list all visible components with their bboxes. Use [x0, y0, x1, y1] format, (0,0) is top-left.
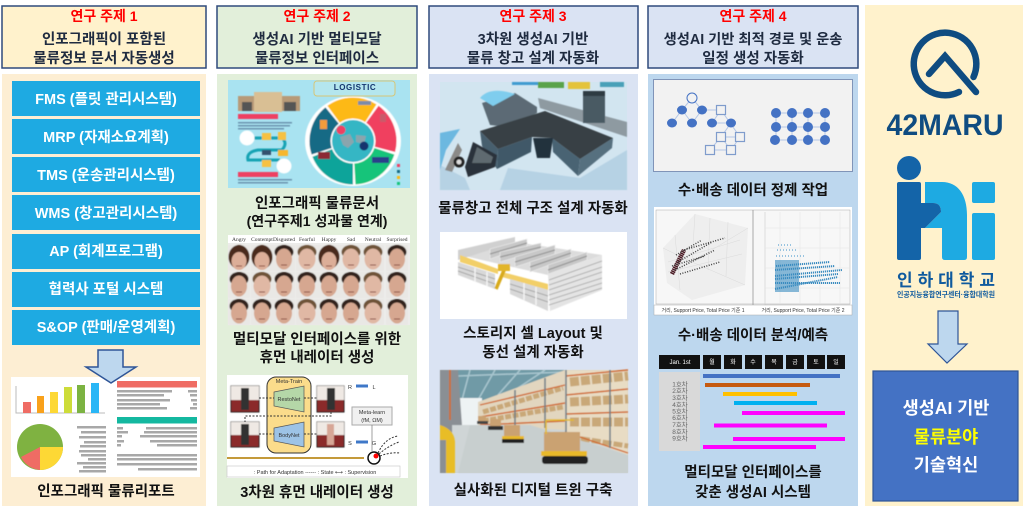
Gantt schedule chart: 토: [813, 359, 819, 366]
system list: WMS (창고관리시스템): [35, 205, 177, 222]
system list: S&OP (판매/운영계획): [37, 319, 175, 336]
meta-learning diagram: S: [348, 441, 352, 447]
facial expression image grid: Neutral: [365, 237, 382, 243]
caption: generative AI system: 갖춘 생성AI 시스템: [695, 484, 811, 501]
caption: data cleaning: 수·배송 데이터 정제 작업: [678, 182, 828, 199]
caption: infographic document: [247, 195, 387, 229]
heading: topic 4: 일정 생성 자동화: [702, 50, 804, 67]
caption: storage cell layout: [463, 325, 603, 361]
heading: topic 2: 물류정보 인터페이스: [255, 50, 379, 67]
caption: data analysis: 수·배송 데이터 분석/예측: [678, 327, 828, 344]
callout: technology innovation: 물류분야: [914, 427, 978, 447]
Gantt schedule chart: 6호차: [672, 413, 688, 422]
Gantt schedule chart: 9호차: [672, 434, 688, 442]
Gantt schedule chart: [659, 355, 845, 451]
facial expression image grid: Surprised: [386, 237, 408, 243]
scatter plots image: [654, 207, 852, 315]
panel background: topic 1 body: [2, 74, 206, 506]
facial expression image grid: Contempt: [251, 237, 273, 243]
heading: topic 4: [648, 6, 858, 68]
facial expression image grid: Disgusted: [273, 237, 295, 243]
system list: FMS (플릿 관리시스템): [35, 91, 177, 108]
caption: generative AI system: [684, 464, 822, 501]
caption: human narrator generation: [233, 331, 401, 366]
meta-learning diagram: R: [348, 385, 352, 391]
heading: topic 3: 3차원 생성AI 기반: [478, 31, 588, 48]
system list: 협력사 포털 시스템: [49, 281, 163, 298]
caption: human narrator generation: 휴먼 내레이터 생성: [260, 349, 374, 366]
caption: realistic digital twin: 실사화된 디지털 트윈 구축: [454, 482, 612, 499]
scatter plots image: 거리, Support Price, Total Price 기준 2: [761, 307, 845, 314]
meta-learning diagram: G: [372, 441, 376, 447]
caption: storage cell layout: 스토리지 셀 Layout 및: [463, 325, 603, 342]
Gantt schedule chart: 금: [792, 359, 798, 366]
Gantt schedule chart: 7호차: [672, 420, 688, 429]
heading: topic 2: 연구 주제 2: [283, 8, 351, 24]
meta-learning diagram: RestoNet: [278, 397, 301, 403]
logistic infographic image: [228, 80, 410, 188]
system list: [12, 81, 200, 345]
scatter plots image: 거리, Support Price, Total Price 기준 1: [661, 307, 745, 314]
caption: storage cell layout: 동선 설계 자동화: [482, 344, 584, 361]
panel: outcome and partners: [865, 5, 1023, 506]
Gantt schedule chart: 목: [771, 359, 777, 366]
Gantt schedule chart: 3호차: [672, 393, 688, 402]
heading: topic 2: 생성AI 기반 멀티모달: [252, 31, 382, 48]
Gantt schedule chart: 월: [709, 358, 715, 366]
3D warehouse model image: [440, 82, 627, 190]
arrow: logos to outcome: [928, 311, 967, 363]
heading: topic 2: [217, 6, 417, 68]
facial expression image grid: Happy: [322, 237, 337, 243]
panel: research topic 1: [2, 6, 206, 506]
panel: research topic 4: [648, 6, 858, 506]
facial expression image grid: Sad: [347, 237, 355, 243]
AGV warehouse image: [440, 370, 628, 473]
caption: generative AI system: 멀티모달 인터페이스를: [684, 464, 822, 481]
heading: topic 3: 연구 주제 3: [499, 8, 567, 24]
panel: research topic 3: [429, 6, 638, 506]
heading: topic 1: 연구 주제 1: [70, 8, 138, 24]
Gantt schedule chart: 1호차: [672, 380, 688, 388]
panel background: topic 3 body: [429, 74, 638, 506]
caption: infographic report: 인포그래픽 물류리포트: [37, 483, 175, 500]
caption: human narrator generation: 멀티모달 인터페이스를 위한: [233, 331, 401, 348]
meta-learning diagram: Meta-Train: [276, 379, 302, 385]
meta-learning diagram: L: [372, 385, 376, 391]
Gantt schedule chart: 수: [750, 359, 756, 366]
logo: 42MARU: 42MARU: [886, 109, 1004, 142]
meta-learning diagram: : Path for Adaptation ------ : State ⟷ : Supervision: [254, 470, 376, 476]
heading: topic 1: [2, 6, 206, 68]
system list: TMS (운송관리시스템): [37, 167, 175, 184]
data graph diagram: [654, 80, 852, 172]
callout: technology innovation: 생성AI 기반: [903, 398, 989, 418]
Gantt schedule chart: 8호차: [672, 427, 688, 436]
system list: MRP (자재소요계획): [43, 129, 169, 146]
heading: topic 4: 연구 주제 4: [719, 8, 787, 24]
panel background: right column: [865, 5, 1023, 506]
meta-learning diagram: (fM, ΩM): [361, 418, 383, 424]
logistic infographic image: LOGISTIC: [334, 83, 376, 92]
arrow: systems to report: [86, 350, 136, 383]
meta-learning diagram: BodyNet: [278, 433, 300, 439]
caption: infographic document: (연구주제1 성과물 연계): [247, 213, 387, 229]
heading: topic 3: [429, 6, 638, 68]
heading: topic 3: 물류 창고 설계 자동화: [467, 50, 599, 67]
Gantt schedule chart: Jan. 1st: [669, 360, 691, 366]
Gantt schedule chart: 5호차: [672, 406, 688, 416]
caption: warehouse structure design: 물류창고 전체 구조 설계 자동화: [438, 200, 628, 217]
system list: AP (회계프로그램): [49, 243, 163, 260]
caption: infographic document: 인포그래픽 물류문서: [255, 195, 379, 212]
meta-learning diagram: Meta-learn: [359, 410, 385, 416]
caption: 3D human narrator: 3차원 휴먼 내레이터 생성: [240, 484, 394, 501]
storage rack image: [440, 232, 627, 319]
logo: Inha University AI: [897, 156, 995, 299]
panel background: topic 4 body: [648, 74, 858, 506]
facial expression image grid: [228, 235, 410, 325]
heading: topic 4: 생성AI 기반 최적 경로 및 운송: [664, 31, 842, 48]
panel: research topic 2: [217, 6, 417, 506]
meta-learning diagram: [227, 375, 408, 478]
heading: topic 1: 인포그래픽이 포함된: [42, 31, 166, 48]
callout: technology innovation: 기술혁신: [914, 455, 978, 475]
heading: topic 1: 물류정보 문서 자동생성: [33, 50, 175, 67]
facial expression image grid: Fearful: [299, 236, 315, 243]
infographic report image: [11, 377, 200, 477]
Gantt schedule chart: 4호차: [672, 400, 688, 409]
logo: Inha University AI: 인공지능융합연구센터·융합대학원: [897, 289, 995, 299]
panel background: topic 2 body: [217, 74, 417, 506]
callout: technology innovation: [873, 371, 1018, 501]
logo: 42MARU: [886, 33, 1004, 142]
Gantt schedule chart: 2호차: [672, 386, 688, 395]
logo: Inha University AI: 인하대학교: [897, 271, 995, 290]
Gantt schedule chart: 일: [833, 358, 839, 366]
Gantt schedule chart: 화: [730, 359, 736, 366]
facial expression image grid: Angry: [232, 237, 246, 243]
